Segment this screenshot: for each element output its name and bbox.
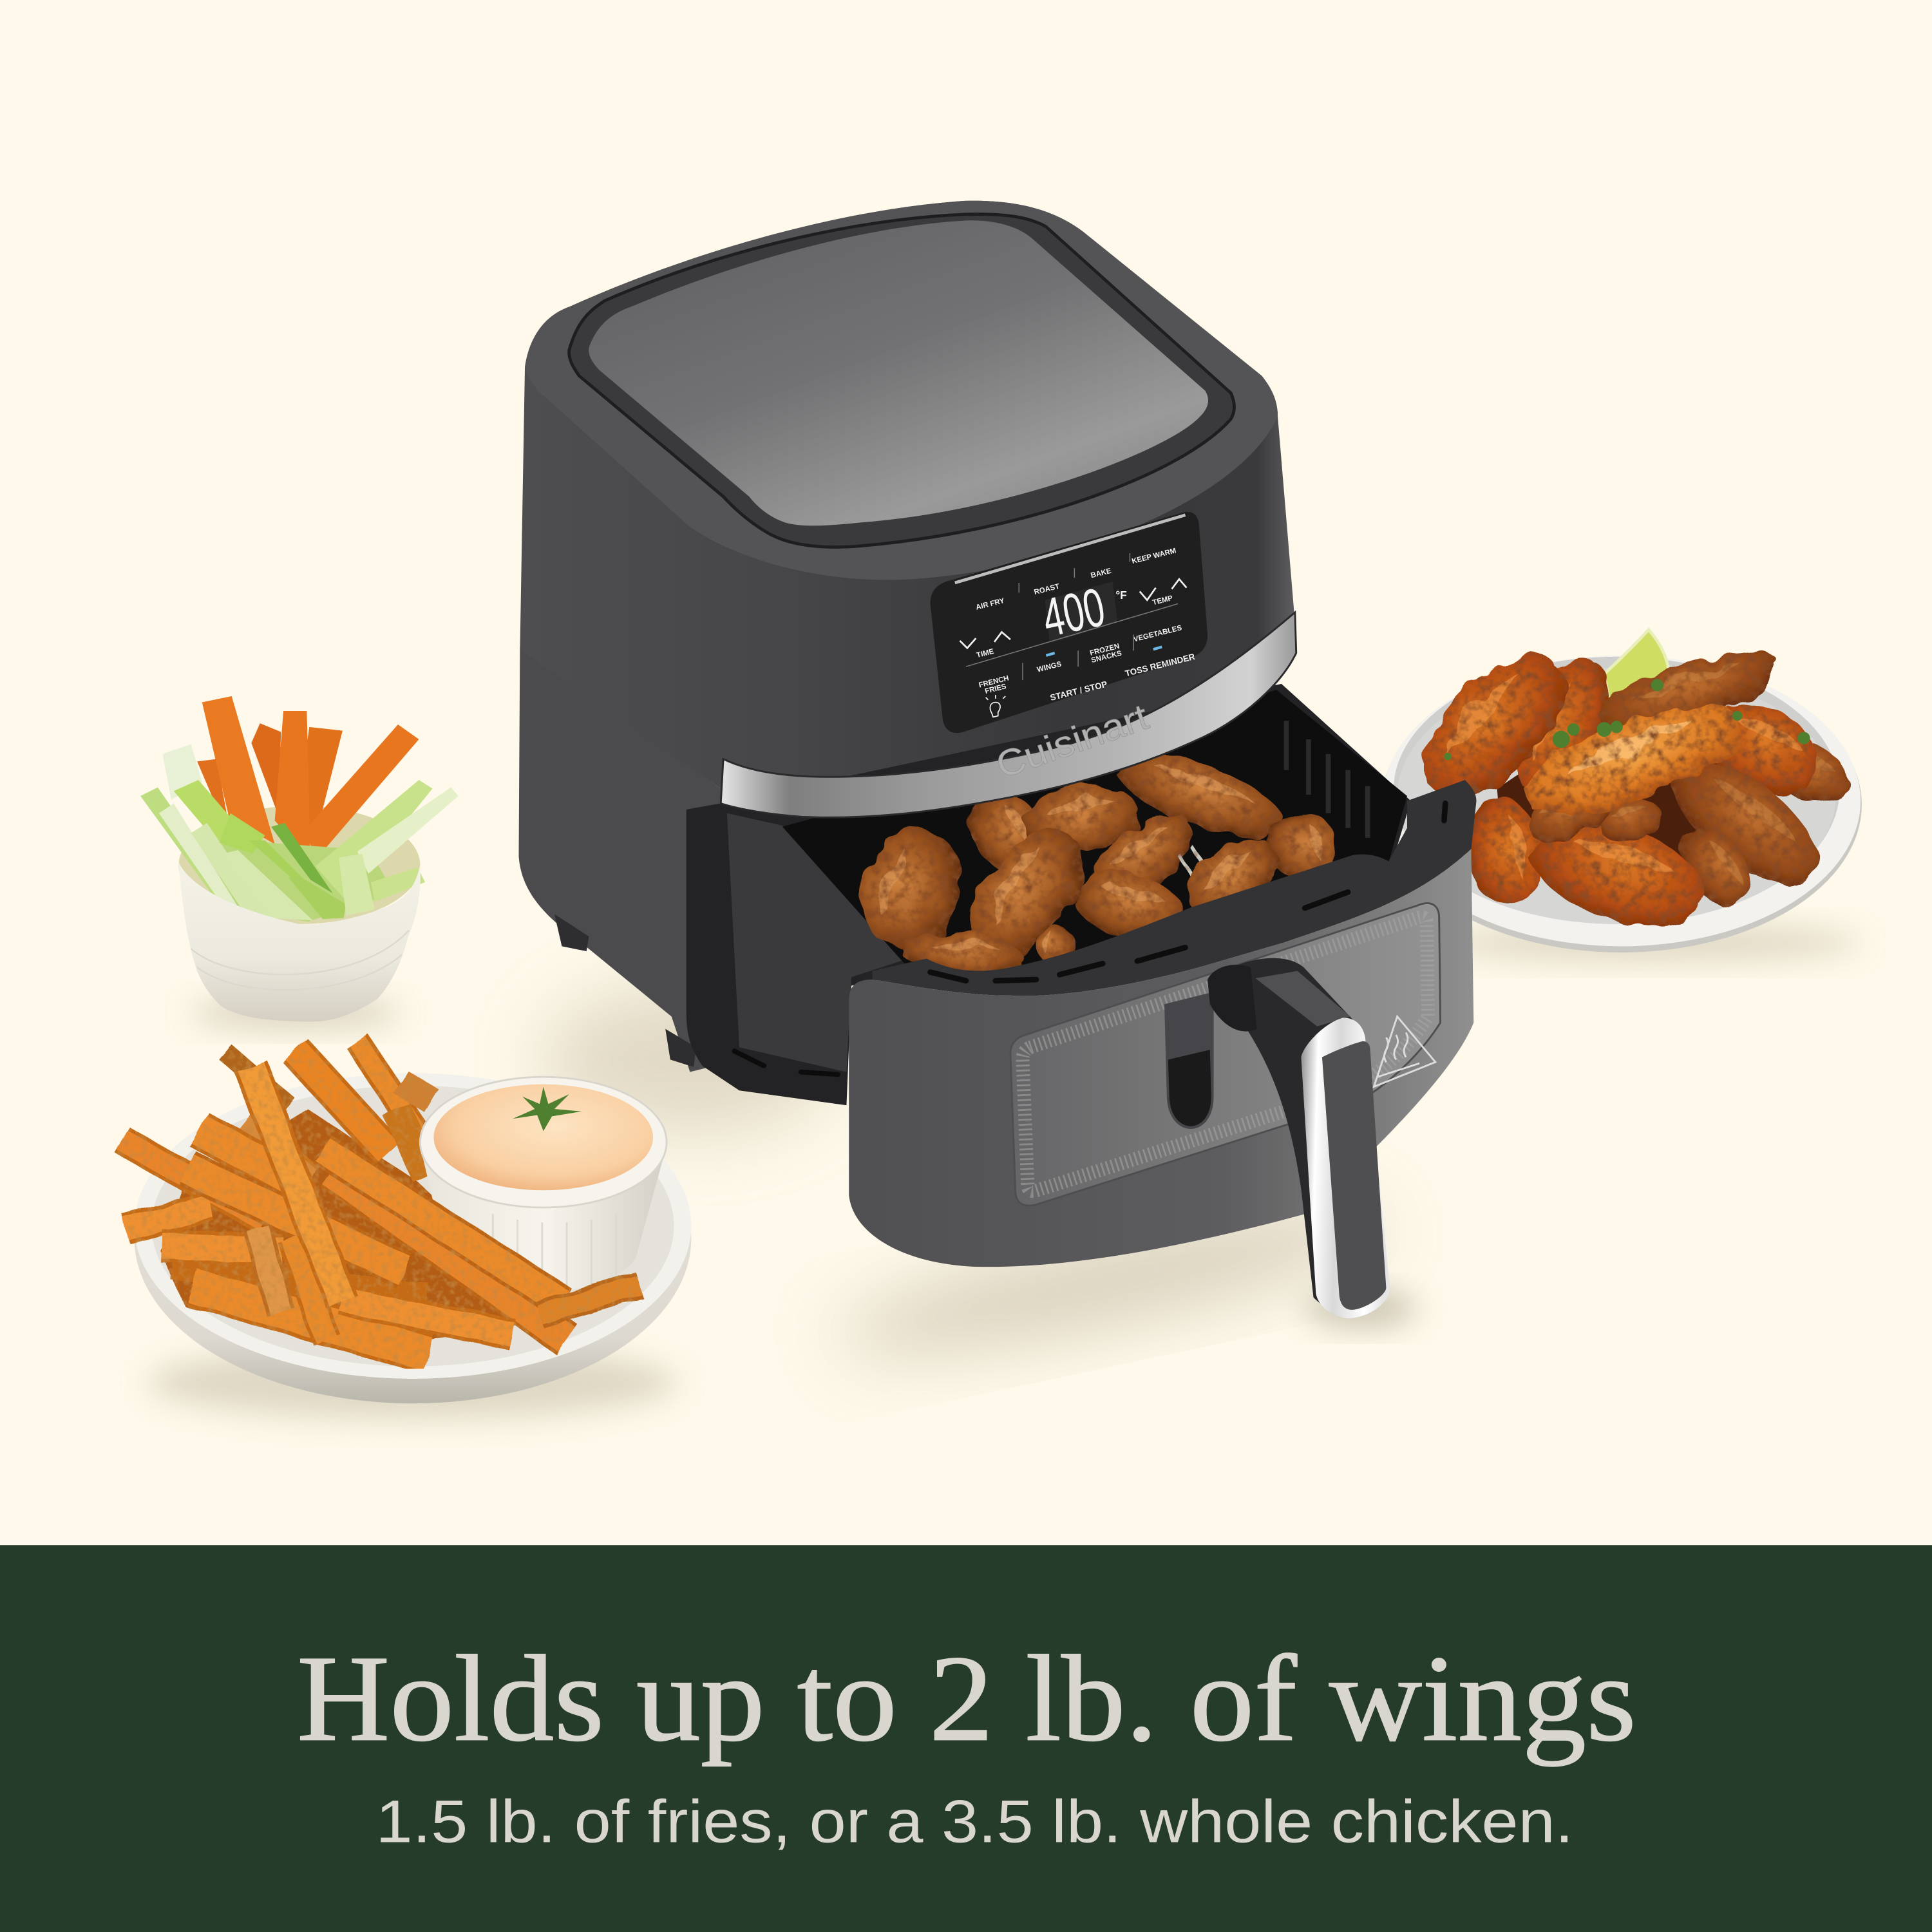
drawer front — [849, 849, 1473, 1267]
TEMP: TEMP — [1151, 594, 1174, 607]
basket rim — [873, 780, 1476, 996]
sweet potato fries plate — [122, 1041, 691, 1403]
icon: light bulb — [986, 695, 1005, 717]
steel band — [721, 612, 1296, 817]
wings — [1400, 631, 1857, 945]
temperature display: 400 — [1037, 576, 1110, 649]
herb garnish — [513, 1087, 582, 1131]
celery — [140, 744, 459, 922]
chicken wings in basket — [845, 737, 1343, 981]
KEEP WARM: KEEP WARM — [1131, 547, 1177, 565]
headline: Holds up to 2 lb. of wings — [297, 1631, 1636, 1767]
VEGETABLES: VEGETABLES — [1133, 624, 1183, 643]
carrots — [197, 696, 419, 860]
lime wedge — [1604, 630, 1669, 702]
bowl interior — [178, 806, 420, 924]
handle inset — [1322, 1041, 1386, 1310]
veggie cup — [140, 696, 459, 1022]
plate — [1381, 657, 1862, 952]
ramekin — [420, 1077, 667, 1292]
Cuisinart emboss: Cuisinart — [991, 696, 1153, 786]
lid plate — [589, 220, 1208, 526]
temperature display: °F — [1115, 589, 1127, 601]
TOSS REMINDER: TOSS REMINDER — [1124, 652, 1196, 678]
AIR FRY: AIR FRY — [975, 597, 1005, 612]
cluster shadow — [1497, 727, 1774, 875]
drawer cavity frame — [687, 684, 1411, 1105]
hot surface warning triangle — [1374, 1016, 1435, 1087]
handle collar — [1208, 965, 1257, 1031]
basket ribs — [1286, 721, 1368, 838]
START/STOP: START / STOP — [1049, 679, 1108, 703]
drawer window — [1010, 903, 1441, 1206]
plate — [135, 1073, 691, 1403]
chrome trim — [1301, 1018, 1390, 1318]
soft floor shadows — [148, 923, 1861, 1419]
rim slots — [931, 803, 1445, 981]
handle — [1208, 958, 1390, 1318]
right plate of glazed wings — [1381, 630, 1862, 952]
ramekin ribs — [493, 1214, 616, 1291]
front fries — [122, 1066, 639, 1354]
FRENCH FRIES: FRIES — [984, 683, 1007, 696]
TIME: TIME — [976, 648, 995, 659]
panel chevrons and dividers — [960, 553, 1186, 680]
viewing slot — [1164, 992, 1214, 1129]
feet — [554, 914, 696, 1067]
lower grate slots — [734, 1051, 838, 1074]
parsley garnish — [1444, 679, 1810, 760]
basket interior — [782, 690, 1407, 973]
window dot pattern — [1023, 917, 1428, 1191]
ROAST: ROAST — [1034, 583, 1060, 596]
control panel — [931, 512, 1208, 733]
WINGS: WINGS — [1036, 660, 1063, 674]
back fries — [160, 1041, 561, 1349]
air fryer — [518, 201, 1476, 1318]
BAKE: BAKE — [1090, 567, 1112, 580]
lower base — [518, 647, 739, 1072]
left basket wall — [727, 813, 904, 1072]
subheading: 1.5 lb. of fries, or a 3.5 lb. whole chicken. — [376, 1787, 1573, 1855]
background — [0, 0, 1932, 1545]
lid groove — [569, 214, 1234, 547]
top surface — [525, 201, 1278, 580]
handle top face — [1256, 971, 1350, 1027]
FRENCH FRIES: FRENCH — [978, 674, 1010, 690]
upper body — [520, 201, 1296, 818]
FROZEN SNACKS: SNACKS — [1090, 650, 1123, 665]
bowl ribs — [191, 931, 409, 990]
dipping sauce — [433, 1084, 653, 1190]
caption band — [0, 1545, 1932, 1932]
white bowl — [178, 862, 421, 1022]
FROZEN SNACKS: FROZEN — [1089, 643, 1121, 658]
handle arm — [1213, 958, 1388, 1316]
